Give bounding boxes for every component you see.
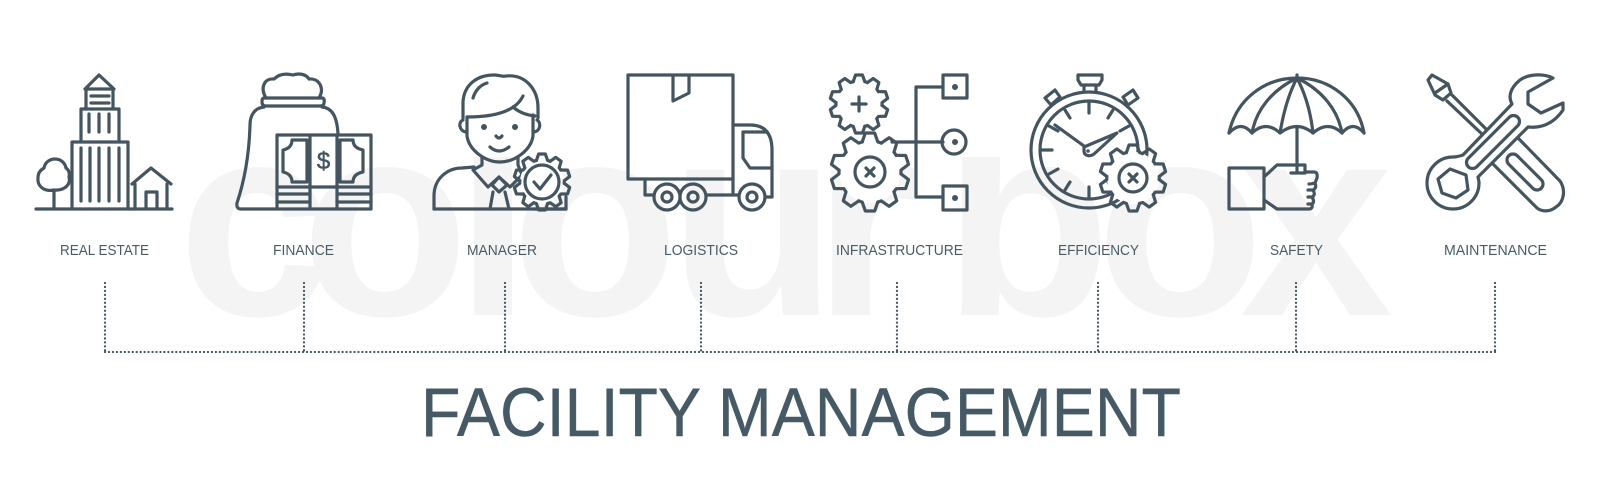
infographic canvas xyxy=(34,72,1566,437)
icon: safety umbrella xyxy=(1229,75,1364,209)
label: logistics: LOGISTICS xyxy=(664,242,738,259)
dollar sign: $ xyxy=(317,148,330,175)
label: efficiency: EFFICIENCY xyxy=(1058,242,1139,259)
icon: real estate xyxy=(36,75,172,209)
dotted connector xyxy=(105,283,1495,352)
title: FACILITY MANAGEMENT xyxy=(421,374,1181,451)
label: maintenance: MAINTENANCE xyxy=(1444,242,1547,259)
label: finance: FINANCE xyxy=(273,242,334,259)
icon: manager xyxy=(434,75,571,210)
icon: infrastructure xyxy=(829,75,967,211)
wrench xyxy=(1427,75,1563,209)
label: safety: SAFETY xyxy=(1270,242,1323,259)
label: manager: MANAGER xyxy=(467,242,537,259)
upper gear xyxy=(829,75,889,133)
screwdriver xyxy=(1428,75,1563,211)
icon: maintenance tools xyxy=(1427,75,1563,211)
watermark: colourbox xyxy=(178,67,1395,374)
icon: efficiency stopwatch xyxy=(1031,75,1167,211)
icon: finance money bag xyxy=(237,74,371,209)
label: real estate: REAL ESTATE xyxy=(60,242,149,259)
icon: logistics truck xyxy=(628,75,772,210)
efficiency gear xyxy=(1099,145,1167,211)
label: infrastructure: INFRASTRUCTURE xyxy=(836,242,963,259)
manager gear xyxy=(513,154,571,210)
lower gear xyxy=(829,133,911,211)
